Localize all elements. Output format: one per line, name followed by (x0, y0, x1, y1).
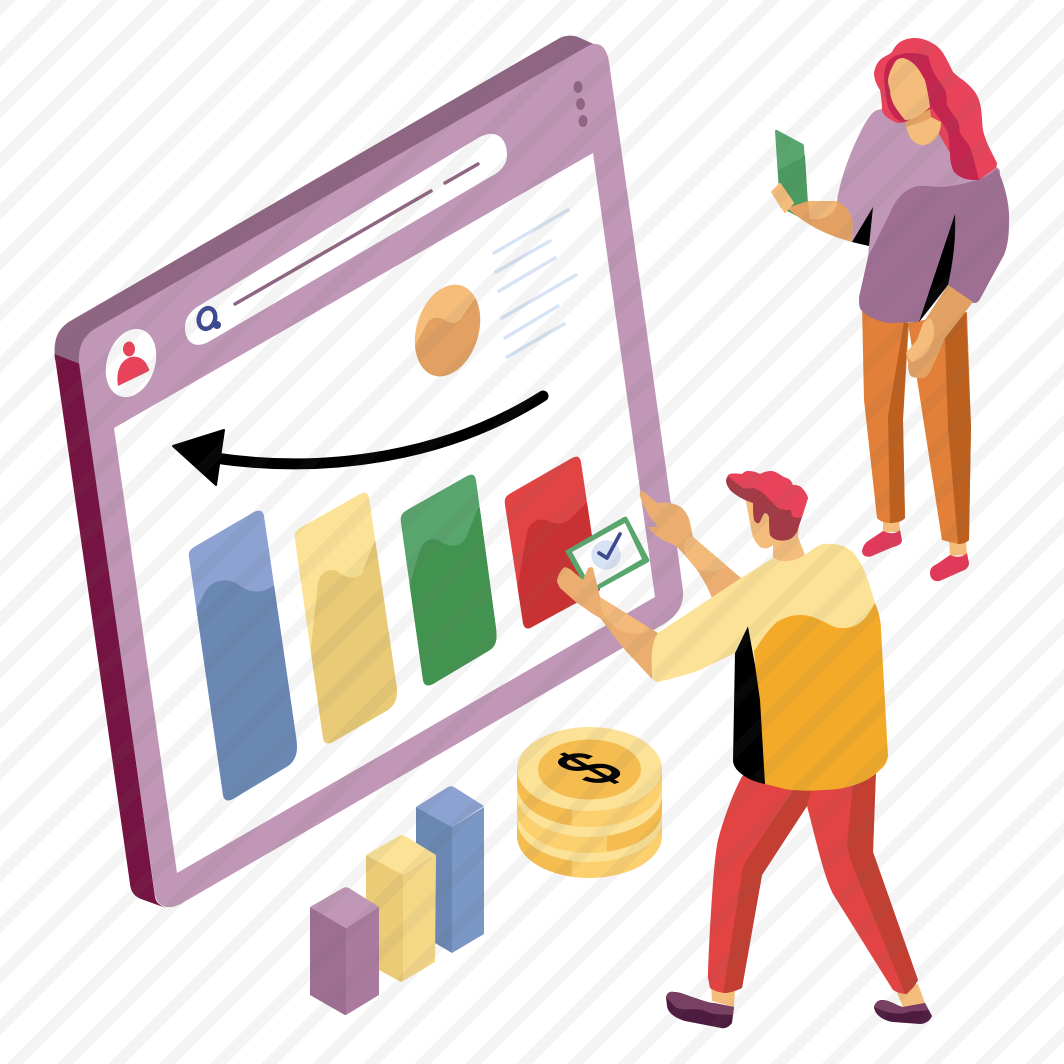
man sweater (652, 544, 888, 791)
monitor left side (54, 354, 166, 908)
coin image placeholder (414, 284, 480, 376)
blue bar (188, 510, 297, 800)
yellow bar (294, 492, 397, 744)
woman right leg (908, 312, 971, 556)
phone (775, 130, 809, 222)
arrow (173, 396, 543, 485)
mini bar chart (310, 786, 484, 1015)
middle coin (517, 780, 662, 853)
coin rim (517, 780, 662, 862)
woman figure (772, 38, 1009, 581)
yellow column (366, 835, 436, 982)
woman hair back (874, 38, 997, 180)
green bar (400, 474, 496, 686)
monitor front frame (79, 44, 683, 907)
paragraph lines (494, 210, 576, 357)
blue column (416, 786, 484, 953)
sweater pale yellow upper and sleeve (652, 544, 875, 682)
woman shoes (862, 530, 969, 581)
check card (565, 517, 649, 594)
man back leg (708, 775, 813, 993)
woman hair dark strands and face (884, 53, 979, 180)
man ankles (711, 984, 925, 1007)
man figure (557, 471, 932, 1028)
red bar (504, 456, 600, 628)
search icon (196, 306, 221, 331)
sweater orange body (753, 600, 888, 791)
monitor top bevel (55, 36, 598, 366)
woman sweater (837, 100, 1009, 323)
bottom coin (517, 780, 662, 878)
avatar icon (97, 322, 165, 404)
man neck and face (745, 498, 805, 562)
sweater black panel (733, 626, 765, 784)
woman raised forearm (772, 184, 853, 242)
coin top (517, 727, 662, 811)
search text lines (235, 164, 478, 304)
dollar sign: $ (535, 742, 642, 794)
coin rim (517, 770, 662, 837)
purple column (310, 887, 379, 1015)
coin stack (517, 727, 662, 878)
upper coin (517, 769, 662, 827)
man hair (726, 471, 808, 541)
woman neck (905, 108, 941, 145)
man shoes (666, 992, 932, 1028)
man near arm (557, 567, 658, 680)
woman left leg (862, 305, 909, 532)
man front leg (807, 770, 918, 994)
search bar (185, 134, 507, 345)
man far arm (640, 491, 741, 598)
monitor window (54, 36, 683, 908)
woman lowered arm and hand (906, 285, 973, 378)
window dots (574, 81, 588, 127)
